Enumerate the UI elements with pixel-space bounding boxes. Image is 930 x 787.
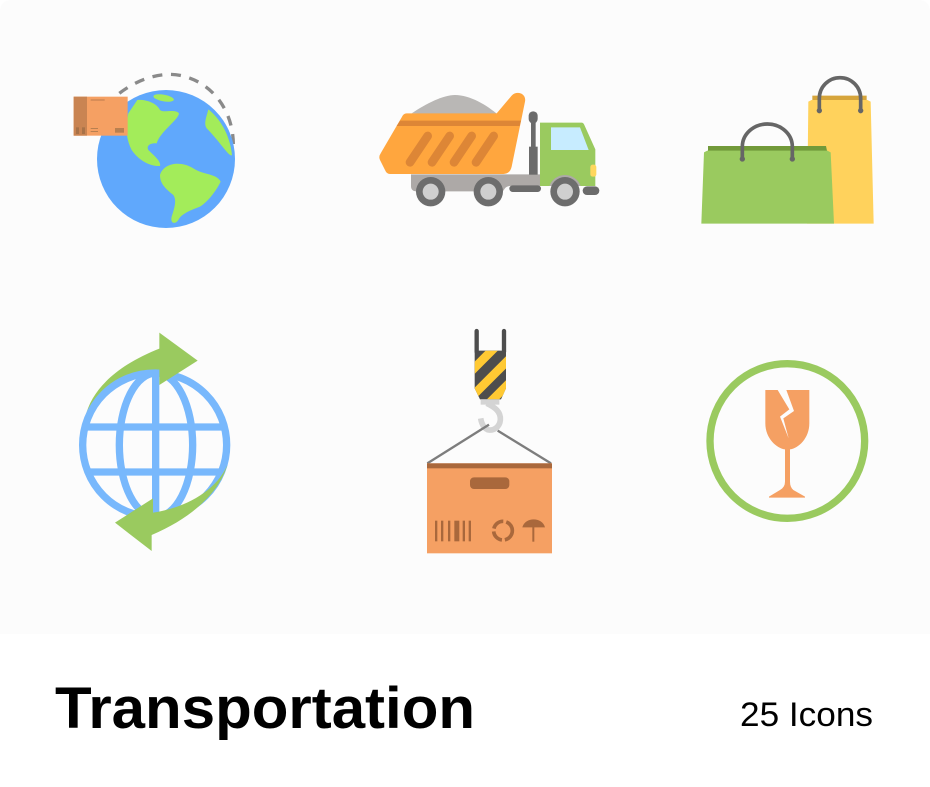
icon: globe with arrows [83,333,227,551]
icon: shopping bags [701,78,874,224]
icon count: 25 Icons [740,696,873,734]
title: Transportation [55,676,475,741]
icon: fragile glass in circle [710,364,865,518]
icon: dump truck [379,93,599,206]
icon: globe with parcel [74,74,235,228]
icon: crane hook with box [427,331,552,553]
